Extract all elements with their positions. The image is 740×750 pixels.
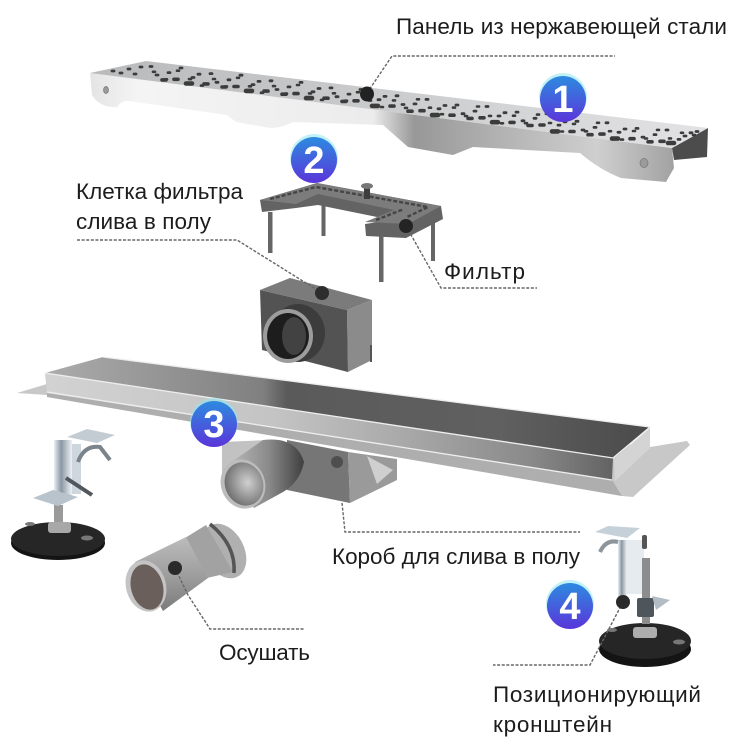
outlet ring xyxy=(263,309,313,363)
housing rivet xyxy=(331,456,343,468)
coupling groove xyxy=(210,524,234,573)
foot holes xyxy=(25,522,93,540)
part: grey coupling xyxy=(120,516,255,616)
badge 4: 4 xyxy=(559,586,581,628)
coupling body xyxy=(135,537,208,611)
part: drain channel xyxy=(17,357,690,515)
channel flange xyxy=(17,384,690,497)
drain housing xyxy=(287,440,350,503)
label: cage xyxy=(76,179,243,234)
upper nut xyxy=(637,598,654,617)
wing bolt xyxy=(600,541,618,552)
part: filter cage box xyxy=(260,278,372,372)
box front face xyxy=(260,290,348,372)
callout marker: coupling xyxy=(168,561,182,575)
threaded bolt xyxy=(642,558,650,624)
channel under-strip xyxy=(47,393,622,496)
badge 1: 1 xyxy=(552,79,574,121)
badge 4 xyxy=(546,580,594,629)
coupling middle xyxy=(185,525,233,578)
side plate xyxy=(72,444,81,494)
panel end interior xyxy=(672,128,708,160)
bracket column xyxy=(618,540,627,597)
wing bolt upper xyxy=(78,447,110,462)
foot top xyxy=(11,522,105,556)
panel rivets xyxy=(104,86,648,168)
channel front wall xyxy=(45,373,613,480)
outlet opening xyxy=(267,313,309,359)
lower plate xyxy=(33,490,78,506)
foot holes xyxy=(607,628,685,644)
coupling opening xyxy=(126,561,168,613)
pipe mouth xyxy=(213,453,273,515)
callout marker: cage xyxy=(315,286,329,300)
coupling wide end xyxy=(193,516,255,586)
perforation holes xyxy=(112,66,698,143)
label: filter: Фильтр xyxy=(444,259,525,284)
coupling mouth xyxy=(120,556,172,616)
frame grooves xyxy=(270,187,428,220)
frame sides xyxy=(260,183,443,238)
channel rim highlights xyxy=(45,357,650,480)
foot side xyxy=(599,631,691,667)
label: coupling: Осушать xyxy=(219,640,310,665)
box top face xyxy=(260,278,372,310)
side plate xyxy=(652,596,670,610)
box right face xyxy=(347,300,372,372)
frame top xyxy=(260,183,441,224)
panel front face xyxy=(90,73,674,182)
outlet pipe xyxy=(226,439,304,508)
leader line: bracket xyxy=(493,602,623,665)
box tab xyxy=(370,345,372,362)
label: bracket xyxy=(493,682,701,737)
part: filter frame xyxy=(260,183,443,282)
housing bracket xyxy=(367,456,393,484)
outlet collar xyxy=(271,304,325,362)
frame legs xyxy=(268,205,435,282)
pipe mouth inside xyxy=(218,456,270,512)
badge 1 xyxy=(539,73,587,122)
label: bracket: Позиционирующий xyxy=(493,682,701,707)
part: left adjustable bracket xyxy=(11,429,115,560)
leader line: cage xyxy=(77,240,322,293)
channel end face xyxy=(614,428,650,481)
label: cage: слива в полу xyxy=(76,209,212,234)
column xyxy=(54,440,72,498)
channel interior xyxy=(45,357,650,458)
badge 3: 3 xyxy=(203,404,225,446)
clip xyxy=(642,535,647,549)
rear support xyxy=(222,440,290,490)
top plate xyxy=(595,526,640,538)
foot side xyxy=(11,526,105,560)
label: bracket: кронштейн xyxy=(493,712,612,737)
badge 2 xyxy=(290,134,338,183)
callout marker: filter xyxy=(399,219,413,233)
nut xyxy=(48,522,71,533)
callout marker: panel xyxy=(360,86,374,102)
leader line: filter xyxy=(406,226,537,288)
panel top face xyxy=(90,61,708,148)
part: stainless steel top panel xyxy=(90,61,708,182)
leader line: channel xyxy=(342,503,580,532)
lower nut xyxy=(633,627,657,638)
top plate xyxy=(67,429,115,443)
label: cage: Клетка фильтра xyxy=(76,179,243,204)
badge 3 xyxy=(190,398,238,447)
leader line: panel xyxy=(367,56,615,93)
frame pin xyxy=(361,183,373,199)
label: panel: Панель из нержавеющей стали xyxy=(396,14,727,39)
leader line: coupling xyxy=(175,568,305,629)
bracket plate xyxy=(622,540,644,594)
label: channel: Короб для слива в полу xyxy=(332,544,581,569)
outlet inner xyxy=(282,317,306,355)
foot top xyxy=(599,623,691,659)
housing slope xyxy=(348,452,397,503)
stem xyxy=(54,505,63,527)
callout marker: bracket xyxy=(616,595,630,609)
part: right adjustable bracket xyxy=(595,526,691,667)
wing bolt lower xyxy=(66,478,92,495)
badge 2: 2 xyxy=(303,140,325,182)
